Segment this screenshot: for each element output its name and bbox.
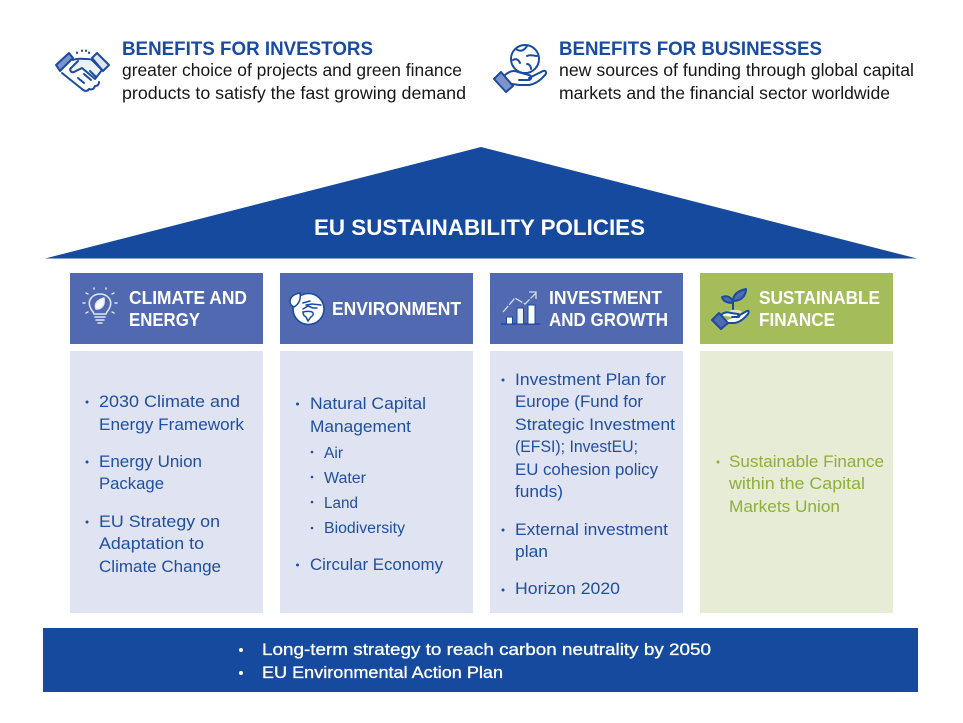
icon: hand holding sprout	[712, 289, 749, 329]
roof: EU sustainability policies: EU SUSTAINABILITY POLICIES	[314, 215, 645, 240]
header: CLIMATE AND	[129, 288, 247, 308]
header	[490, 273, 683, 344]
roof: EU sustainability policies	[45, 147, 917, 258]
icon: growth chart	[501, 292, 540, 324]
body list	[280, 351, 473, 613]
foundation bar: Long-term strategy to reach carbon neutrality by 2050	[262, 640, 711, 659]
body list: Management	[310, 417, 411, 436]
header	[700, 273, 893, 344]
body list: Package	[99, 474, 164, 493]
body list: 2030 Climate and	[99, 392, 240, 411]
body list: Energy Framework	[99, 415, 244, 434]
heading: BENEFITS FOR INVESTORS	[122, 39, 373, 60]
description: greater choice of projects and green finance	[122, 60, 462, 80]
body list: Climate Change	[99, 557, 221, 576]
description: products to satisfy the fast growing demand	[122, 83, 466, 103]
foundation bar: EU Environmental Action Plan	[262, 663, 503, 682]
body list: Strategic Investment	[515, 415, 675, 434]
body list: Sustainable Finance	[729, 452, 884, 471]
header	[70, 273, 263, 344]
body list: plan	[515, 542, 548, 561]
description: markets and the financial sector worldwide	[559, 83, 890, 103]
body list: Natural Capital	[310, 394, 426, 413]
body list: EU Strategy on	[99, 512, 220, 531]
body list: within the Capital	[728, 474, 865, 493]
foundation bar	[43, 628, 918, 692]
body list: External investment	[515, 520, 668, 539]
body list: Markets Union	[729, 497, 840, 516]
icon: globe with leaf	[290, 293, 324, 324]
header: INVESTMENT	[549, 288, 662, 308]
body list	[490, 351, 683, 613]
panel: benefits for investors	[56, 39, 466, 103]
body list: EU cohesion policy	[515, 460, 658, 479]
body list: Investment Plan for	[515, 370, 666, 389]
body list: Horizon 2020	[515, 579, 620, 598]
body list: (EFSI); InvestEU;	[515, 437, 638, 456]
body list: Air	[324, 445, 343, 462]
body list: Land	[324, 495, 358, 512]
column: climate and energy	[70, 273, 263, 613]
heading: BENEFITS FOR BUSINESSES	[559, 39, 822, 60]
body list: Adaptation to	[99, 534, 204, 553]
body list: Water	[324, 470, 366, 487]
description	[559, 60, 914, 103]
description: new sources of funding through global capital	[559, 60, 914, 80]
icon: light bulb with leaf	[83, 288, 117, 323]
column: sustainable finance	[700, 273, 893, 613]
header: AND GROWTH	[549, 310, 668, 330]
icon: handshake	[56, 50, 109, 91]
column: investment and growth	[490, 273, 683, 613]
body list: Biodiversity	[324, 520, 405, 537]
header: ENVIRONMENT	[332, 299, 461, 319]
column: environment	[280, 273, 473, 613]
header	[280, 273, 473, 344]
header: ENERGY	[129, 310, 200, 330]
body list: Circular Economy	[310, 555, 443, 574]
panel: benefits for businesses	[494, 39, 914, 103]
body list: Energy Union	[99, 452, 202, 471]
icon: hand holding globe	[494, 45, 546, 92]
header: SUSTAINABLE	[759, 288, 880, 308]
description	[122, 60, 466, 103]
body list	[70, 351, 263, 613]
header: FINANCE	[759, 310, 835, 330]
body list	[700, 351, 893, 613]
body list: Europe (Fund for	[515, 392, 643, 411]
body list: funds)	[515, 482, 563, 501]
